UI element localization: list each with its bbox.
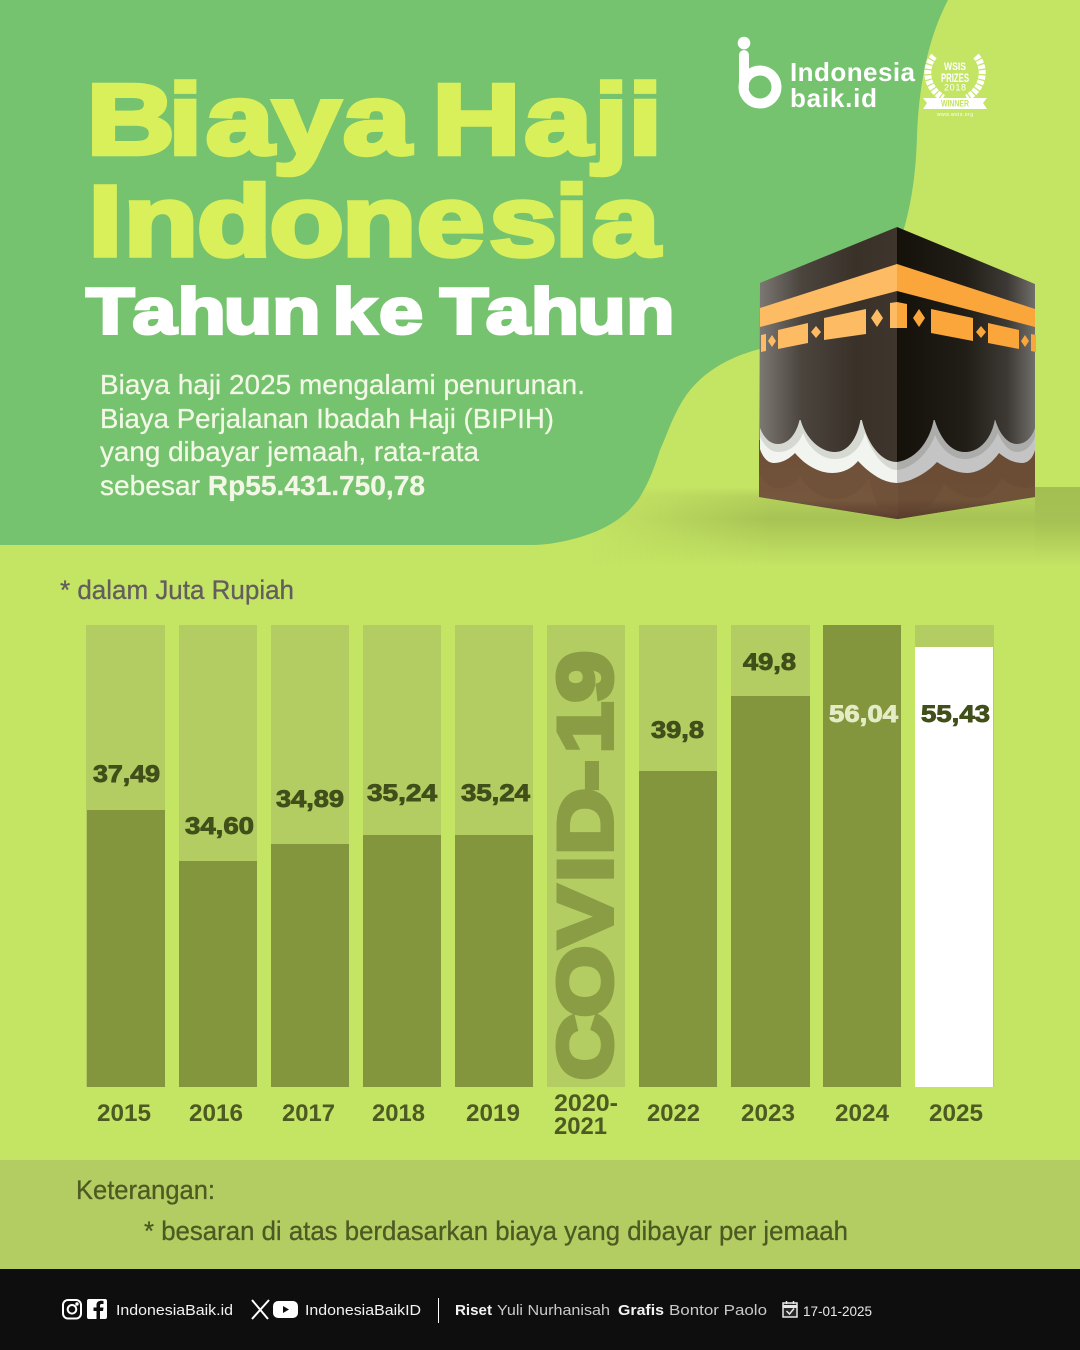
badge: WSIS Prizes 2018 winner: WINNER bbox=[941, 98, 969, 108]
bar 2016: 2016 bbox=[189, 1100, 243, 1127]
gold ornaments left bbox=[761, 302, 897, 352]
credits bbox=[455, 1302, 767, 1319]
bar 2022 bbox=[639, 625, 717, 1127]
bar 2023: 2023 bbox=[741, 1100, 795, 1127]
badge: WSIS Prizes 2018 winner bbox=[923, 56, 987, 118]
bar chart bbox=[86, 625, 994, 1140]
title: Indonesia bbox=[88, 165, 661, 277]
logo: Indonesia Baik bbox=[738, 37, 916, 113]
bar 2024: 2024 bbox=[835, 1100, 890, 1127]
bar 2025 bbox=[915, 625, 994, 1127]
title: Tahun ke Tahun bbox=[86, 275, 675, 348]
credits: Riset bbox=[455, 1302, 492, 1319]
dark cloth left bbox=[760, 405, 897, 462]
green header shape bbox=[0, 0, 948, 545]
cloth shading bbox=[759, 445, 1035, 511]
footer bbox=[0, 1269, 1080, 1350]
handle: IndonesiaBaik.id: IndonesiaBaik.id bbox=[116, 1302, 233, 1319]
intro text: Biaya haji 2025 mengalami penurunan. bbox=[100, 369, 585, 400]
badge: WSIS Prizes 2018 winner: www.wsis.org bbox=[937, 112, 973, 118]
icon: Kaaba bbox=[759, 227, 1036, 519]
dark cloth right bbox=[897, 405, 1035, 462]
panel: keterangan: Keterangan: bbox=[76, 1175, 215, 1205]
panel: keterangan: * besaran di atas berdasarkan biaya yang dibayar per jemaah bbox=[144, 1216, 848, 1246]
bar 2017: 34,89 bbox=[276, 786, 344, 813]
bar 2020-2021 COVID-19: 2020- bbox=[554, 1090, 618, 1117]
bar 2019: 35,24 bbox=[461, 780, 531, 807]
icon: instagram bbox=[63, 1300, 81, 1318]
bar 2018: 2018 bbox=[372, 1100, 425, 1127]
bar 2020-2021 COVID-19: COVID-19 bbox=[543, 651, 628, 1080]
intro text: Biaya Perjalanan Ibadah Haji (BIPIH) bbox=[100, 403, 554, 434]
badge: WSIS Prizes 2018 winner: PRIZES bbox=[941, 71, 969, 85]
logo: Indonesia Baik: Indonesia bbox=[790, 57, 916, 87]
badge: WSIS Prizes 2018 winner: WSIS bbox=[944, 61, 966, 73]
ground shadow bbox=[634, 487, 1080, 556]
title bbox=[86, 63, 675, 348]
bar 2023: 49,8 bbox=[743, 649, 796, 676]
bar 2018: 35,24 bbox=[367, 780, 438, 807]
bar 2024 bbox=[823, 625, 901, 1127]
icon: X bbox=[252, 1300, 269, 1319]
bar 2025: 55,43 bbox=[921, 701, 990, 728]
bar 2019: 2019 bbox=[466, 1100, 520, 1127]
bar 2025: 2025 bbox=[929, 1100, 983, 1127]
bar 2018 bbox=[363, 625, 441, 1127]
note: dalam juta rupiah: * dalam Juta Rupiah bbox=[60, 575, 294, 605]
date: 17-01-2025 bbox=[803, 1303, 872, 1319]
bar 2019 bbox=[455, 625, 533, 1127]
title: Biaya Haji bbox=[87, 63, 662, 176]
white cloth left bbox=[760, 425, 897, 483]
bar 2017: 2017 bbox=[282, 1100, 335, 1127]
bar 2015 bbox=[86, 625, 165, 1127]
grey cloth right bbox=[897, 420, 1035, 470]
gold band bbox=[760, 264, 897, 327]
bar 2020-2021 COVID-19: 2021 bbox=[554, 1113, 607, 1140]
bar 2015: 2015 bbox=[97, 1100, 151, 1127]
cloth base bbox=[759, 440, 1035, 519]
cloth right shade bbox=[898, 440, 1035, 519]
credits: Grafis bbox=[618, 1302, 664, 1319]
icon: calendar bbox=[783, 1301, 797, 1317]
grey cloth left bbox=[760, 420, 897, 470]
bar 2016: 34,60 bbox=[185, 813, 254, 840]
intro text: sebesar Rp55.431.750,78 bbox=[100, 470, 425, 501]
icon: youtube bbox=[273, 1301, 298, 1318]
gold ornaments right bbox=[897, 302, 1036, 352]
bar 2023 bbox=[731, 625, 810, 1127]
bar 2022: 2022 bbox=[647, 1100, 700, 1127]
white cloth right bbox=[897, 425, 1035, 483]
logo: Indonesia Baik: baik.id bbox=[790, 83, 877, 113]
credits: Yuli Nurhanisah bbox=[497, 1302, 610, 1319]
credits: Bontor Paolo bbox=[669, 1302, 767, 1319]
handle: IndonesiaBaikID: IndonesiaBaikID bbox=[305, 1302, 421, 1319]
intro text bbox=[100, 369, 585, 501]
badge: WSIS Prizes 2018 winner: 2018 bbox=[944, 82, 966, 92]
intro text: yang dibayar jemaah, rata-rata bbox=[100, 436, 479, 467]
bar 2024: 56,04 bbox=[829, 701, 899, 728]
bar 2016 bbox=[179, 625, 257, 1127]
bar 2015: 37,49 bbox=[93, 761, 160, 788]
bar 2017 bbox=[271, 625, 349, 1127]
bar 2022: 39,8 bbox=[651, 717, 704, 744]
panel: keterangan bbox=[0, 1160, 1080, 1269]
icon: facebook bbox=[87, 1299, 107, 1319]
